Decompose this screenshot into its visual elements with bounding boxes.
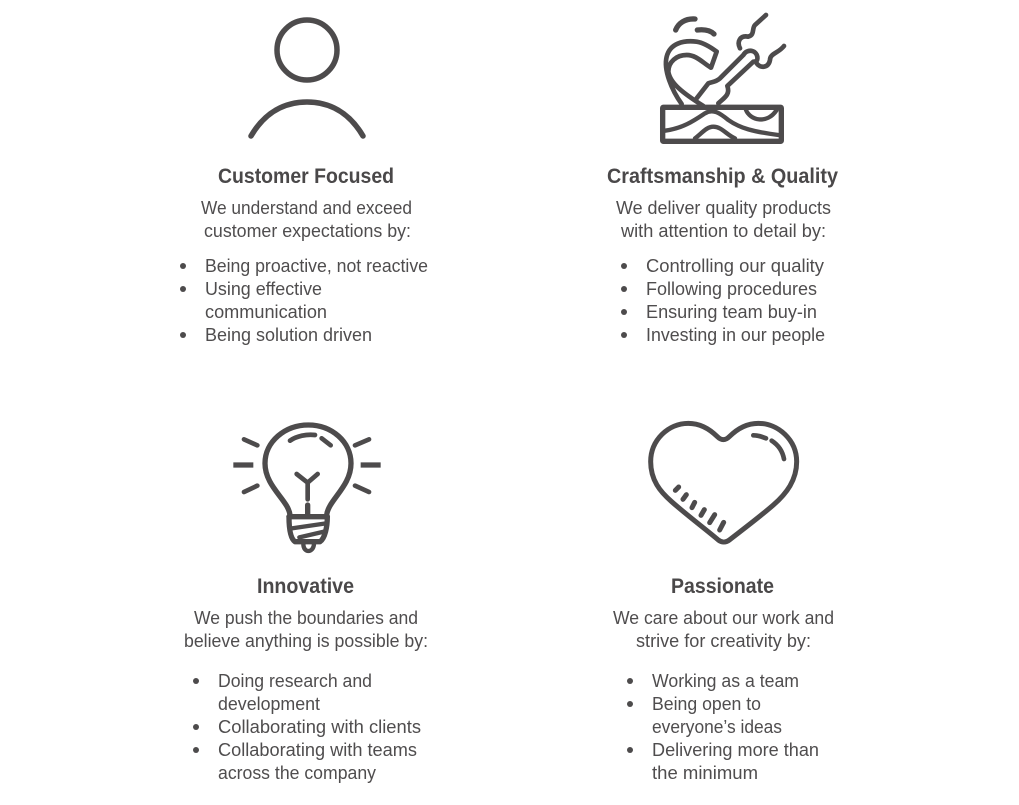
bullet list: craftsmanship and quality: Investing in our people	[646, 325, 825, 345]
bullet list: passionate: the minimum	[652, 763, 758, 783]
bullet list: innovative: Collaborating with clients	[218, 717, 421, 737]
intro text: innovative	[184, 608, 428, 651]
icon: light bulb	[233, 425, 381, 551]
intro text: passionate	[613, 608, 834, 651]
bullet list: craftsmanship and quality: Ensuring team buy-in	[646, 302, 817, 322]
intro text: customer focused	[201, 198, 412, 241]
bullet list: innovative: across the company	[218, 763, 376, 783]
bullet list: craftsmanship and quality	[621, 256, 825, 345]
intro text: innovative: We push the boundaries and	[194, 608, 418, 628]
intro text: craftsmanship and quality	[616, 198, 831, 241]
icon: person	[251, 20, 363, 136]
heading: innovative: Innovative	[257, 575, 354, 598]
intro text: craftsmanship and quality: We deliver quality products	[616, 198, 831, 218]
bullet list: innovative: Collaborating with teams	[218, 740, 417, 760]
bullet list: customer focused: communication	[205, 302, 327, 322]
heading: customer focused: Customer Focused	[218, 165, 394, 188]
panel: innovative	[184, 425, 428, 783]
heading: craftsmanship and quality: Craftsmanship & Quality	[607, 165, 838, 188]
intro text: innovative: believe anything is possible by:	[184, 631, 428, 651]
panel: passionate	[613, 423, 834, 783]
bullet list: customer focused	[180, 256, 428, 345]
bullet list: passionate: Delivering more than	[652, 740, 819, 760]
bullet list: customer focused: Using effective	[205, 279, 322, 299]
intro text: craftsmanship and quality: with attention to detail by:	[620, 221, 826, 241]
bullet list: customer focused: Being solution driven	[205, 325, 372, 345]
panel: customer focused	[180, 20, 428, 345]
bullet list: innovative: development	[218, 694, 320, 714]
icon: heart	[651, 423, 797, 542]
bullet list: passionate: everyone’s ideas	[652, 717, 782, 737]
bullet list: innovative: Doing research and	[218, 671, 372, 691]
bullet list: craftsmanship and quality: Following procedures	[646, 279, 817, 299]
intro text: passionate: strive for creativity by:	[636, 631, 811, 651]
bullet list: craftsmanship and quality: Controlling our quality	[646, 256, 824, 276]
bullet list: passionate	[627, 671, 819, 783]
intro text: customer focused: We understand and exceed	[201, 198, 412, 218]
intro text: customer focused: customer expectations by:	[204, 221, 411, 241]
panel: craftsmanship and quality	[607, 15, 838, 345]
bullet list: passionate: Being open to	[652, 694, 761, 714]
icon: chisel carving wood	[663, 15, 784, 141]
heading: passionate: Passionate	[671, 575, 774, 598]
bullet list: passionate: Working as a team	[652, 671, 799, 691]
intro text: passionate: We care about our work and	[613, 608, 834, 628]
bullet list: innovative	[193, 671, 421, 783]
bullet list: customer focused: Being proactive, not reactive	[205, 256, 428, 276]
